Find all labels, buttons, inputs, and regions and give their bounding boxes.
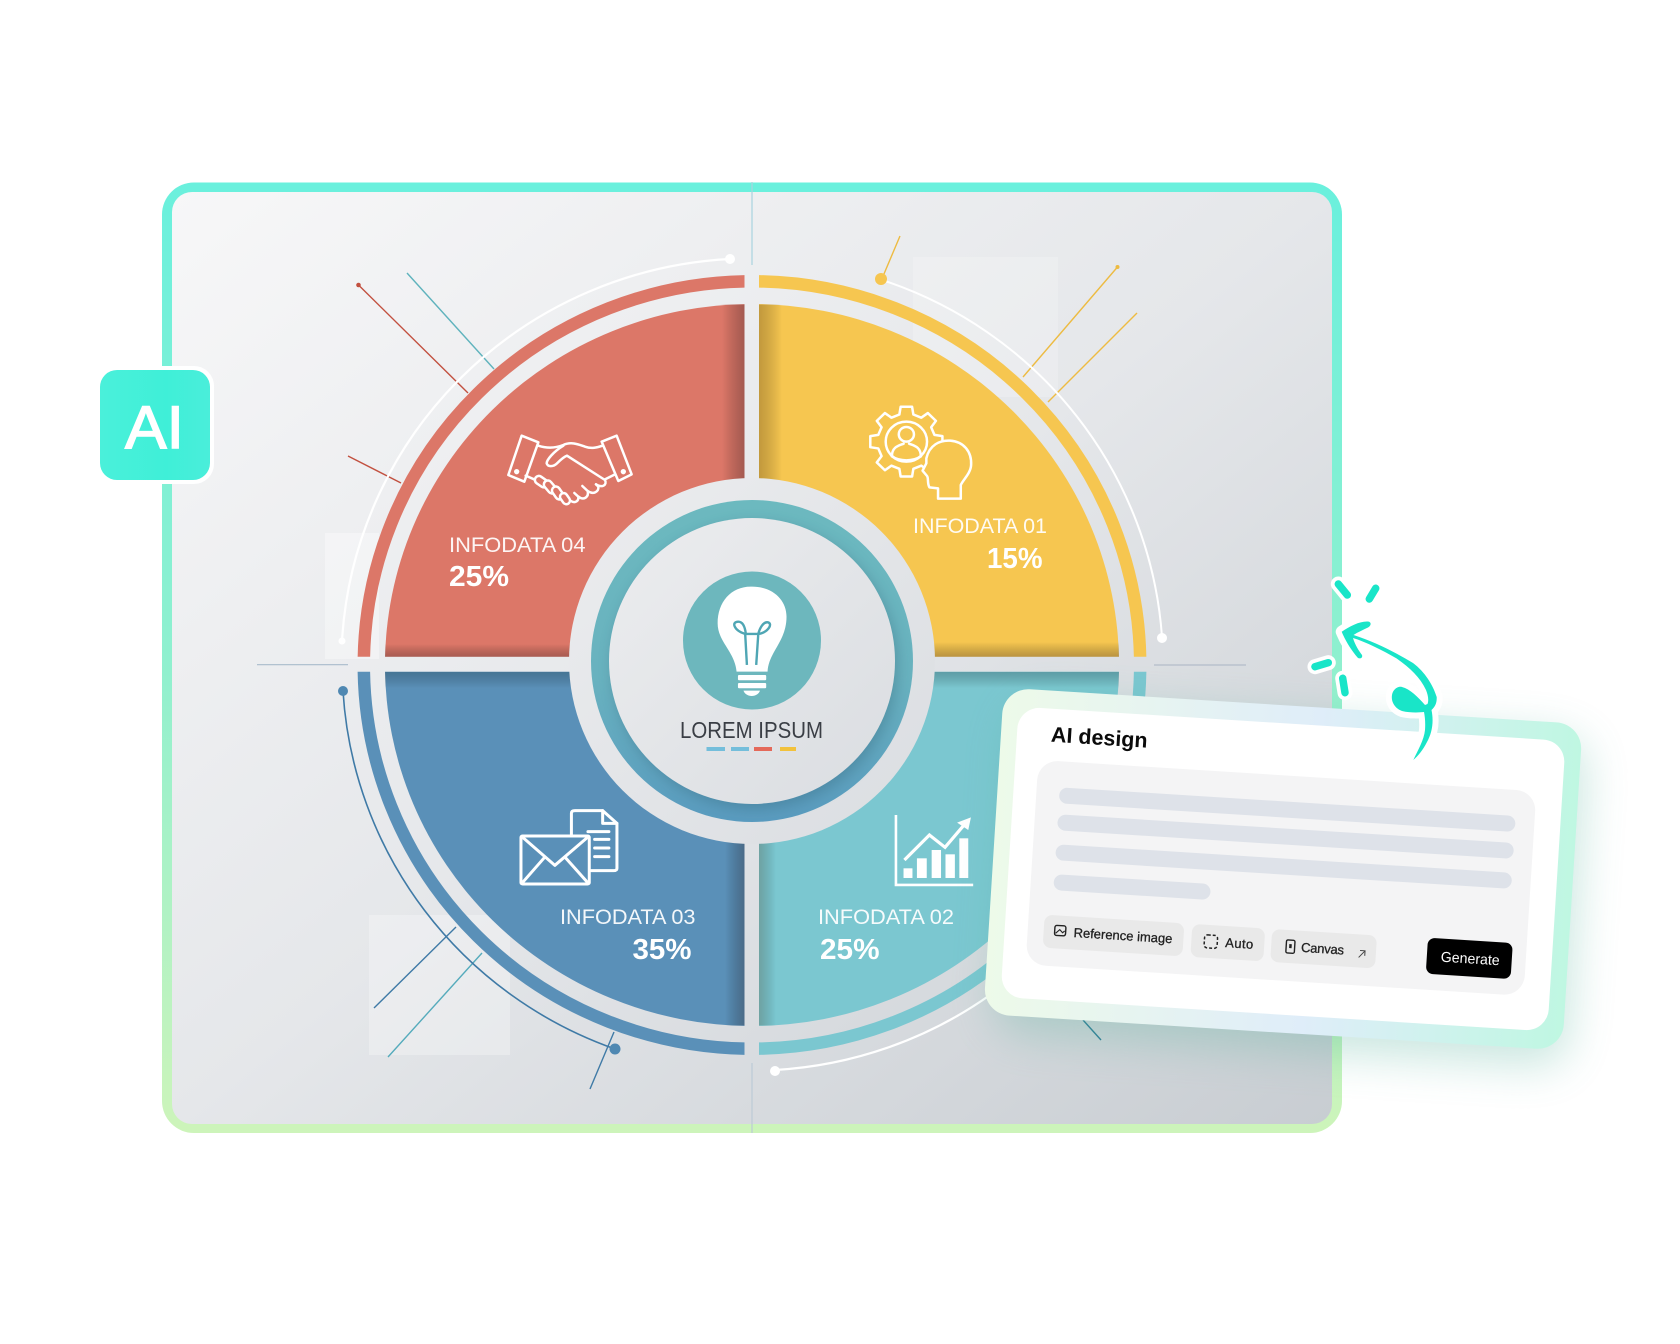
center title: lorem ipsum <box>680 717 823 751</box>
segment: infodata 02 teal <box>759 672 1146 1055</box>
card title: AI design <box>1050 723 1148 753</box>
icon: light bulb <box>683 572 821 710</box>
segment: infodata 03 blue <box>358 672 744 1055</box>
chip: auto: Auto <box>1225 935 1254 952</box>
button: generate <box>1426 938 1513 979</box>
panel: AI design card <box>982 688 1588 1068</box>
chip: canvas: Canvas <box>1301 940 1345 958</box>
label: infodata 02: INFODATA 02 <box>818 905 954 929</box>
arrow: hand-drawn teal arrow with sparks <box>1315 584 1437 760</box>
outer thin arcs with dots <box>338 254 1167 1076</box>
label: infodata 01: INFODATA 01 <box>913 514 1047 538</box>
icon: gear and head <box>870 407 971 499</box>
prompt input panel <box>1026 760 1536 996</box>
label: infodata 01: 15% <box>987 543 1043 575</box>
chip: reference image <box>1043 915 1184 956</box>
label: infodata 02 <box>818 905 954 966</box>
badge: AI <box>97 366 214 484</box>
label: infodata 04: INFODATA 04 <box>449 533 586 557</box>
label: infodata 02: 25% <box>820 934 880 966</box>
label: infodata 01 <box>913 514 1047 575</box>
panel: gradient frame <box>162 182 1342 1133</box>
label: infodata 03: INFODATA 03 <box>560 905 696 929</box>
label: infodata 04: 25% <box>449 561 509 593</box>
icon: envelope and document <box>521 811 617 884</box>
segment: infodata 04 red <box>358 275 744 657</box>
axis guide lines <box>257 182 1246 1133</box>
icon: bar chart with arrow <box>896 815 973 885</box>
button: generate: Generate <box>1440 950 1500 969</box>
chip: canvas <box>1270 929 1377 968</box>
badge: AI: AI <box>125 394 184 461</box>
chip: reference image: Reference image <box>1073 925 1173 946</box>
icon: handshake <box>508 436 632 506</box>
segment: infodata 01 yellow <box>759 275 1146 657</box>
background: pale translucent blocks <box>325 257 1058 1055</box>
center title: lorem ipsum: LOREM IPSUM <box>680 717 823 743</box>
chip: auto <box>1190 924 1265 961</box>
center hub <box>569 478 935 844</box>
callout leader lines <box>348 236 1137 1089</box>
label: infodata 03 <box>560 905 696 966</box>
label: infodata 03: 35% <box>632 934 692 966</box>
label: infodata 04 <box>449 533 586 593</box>
